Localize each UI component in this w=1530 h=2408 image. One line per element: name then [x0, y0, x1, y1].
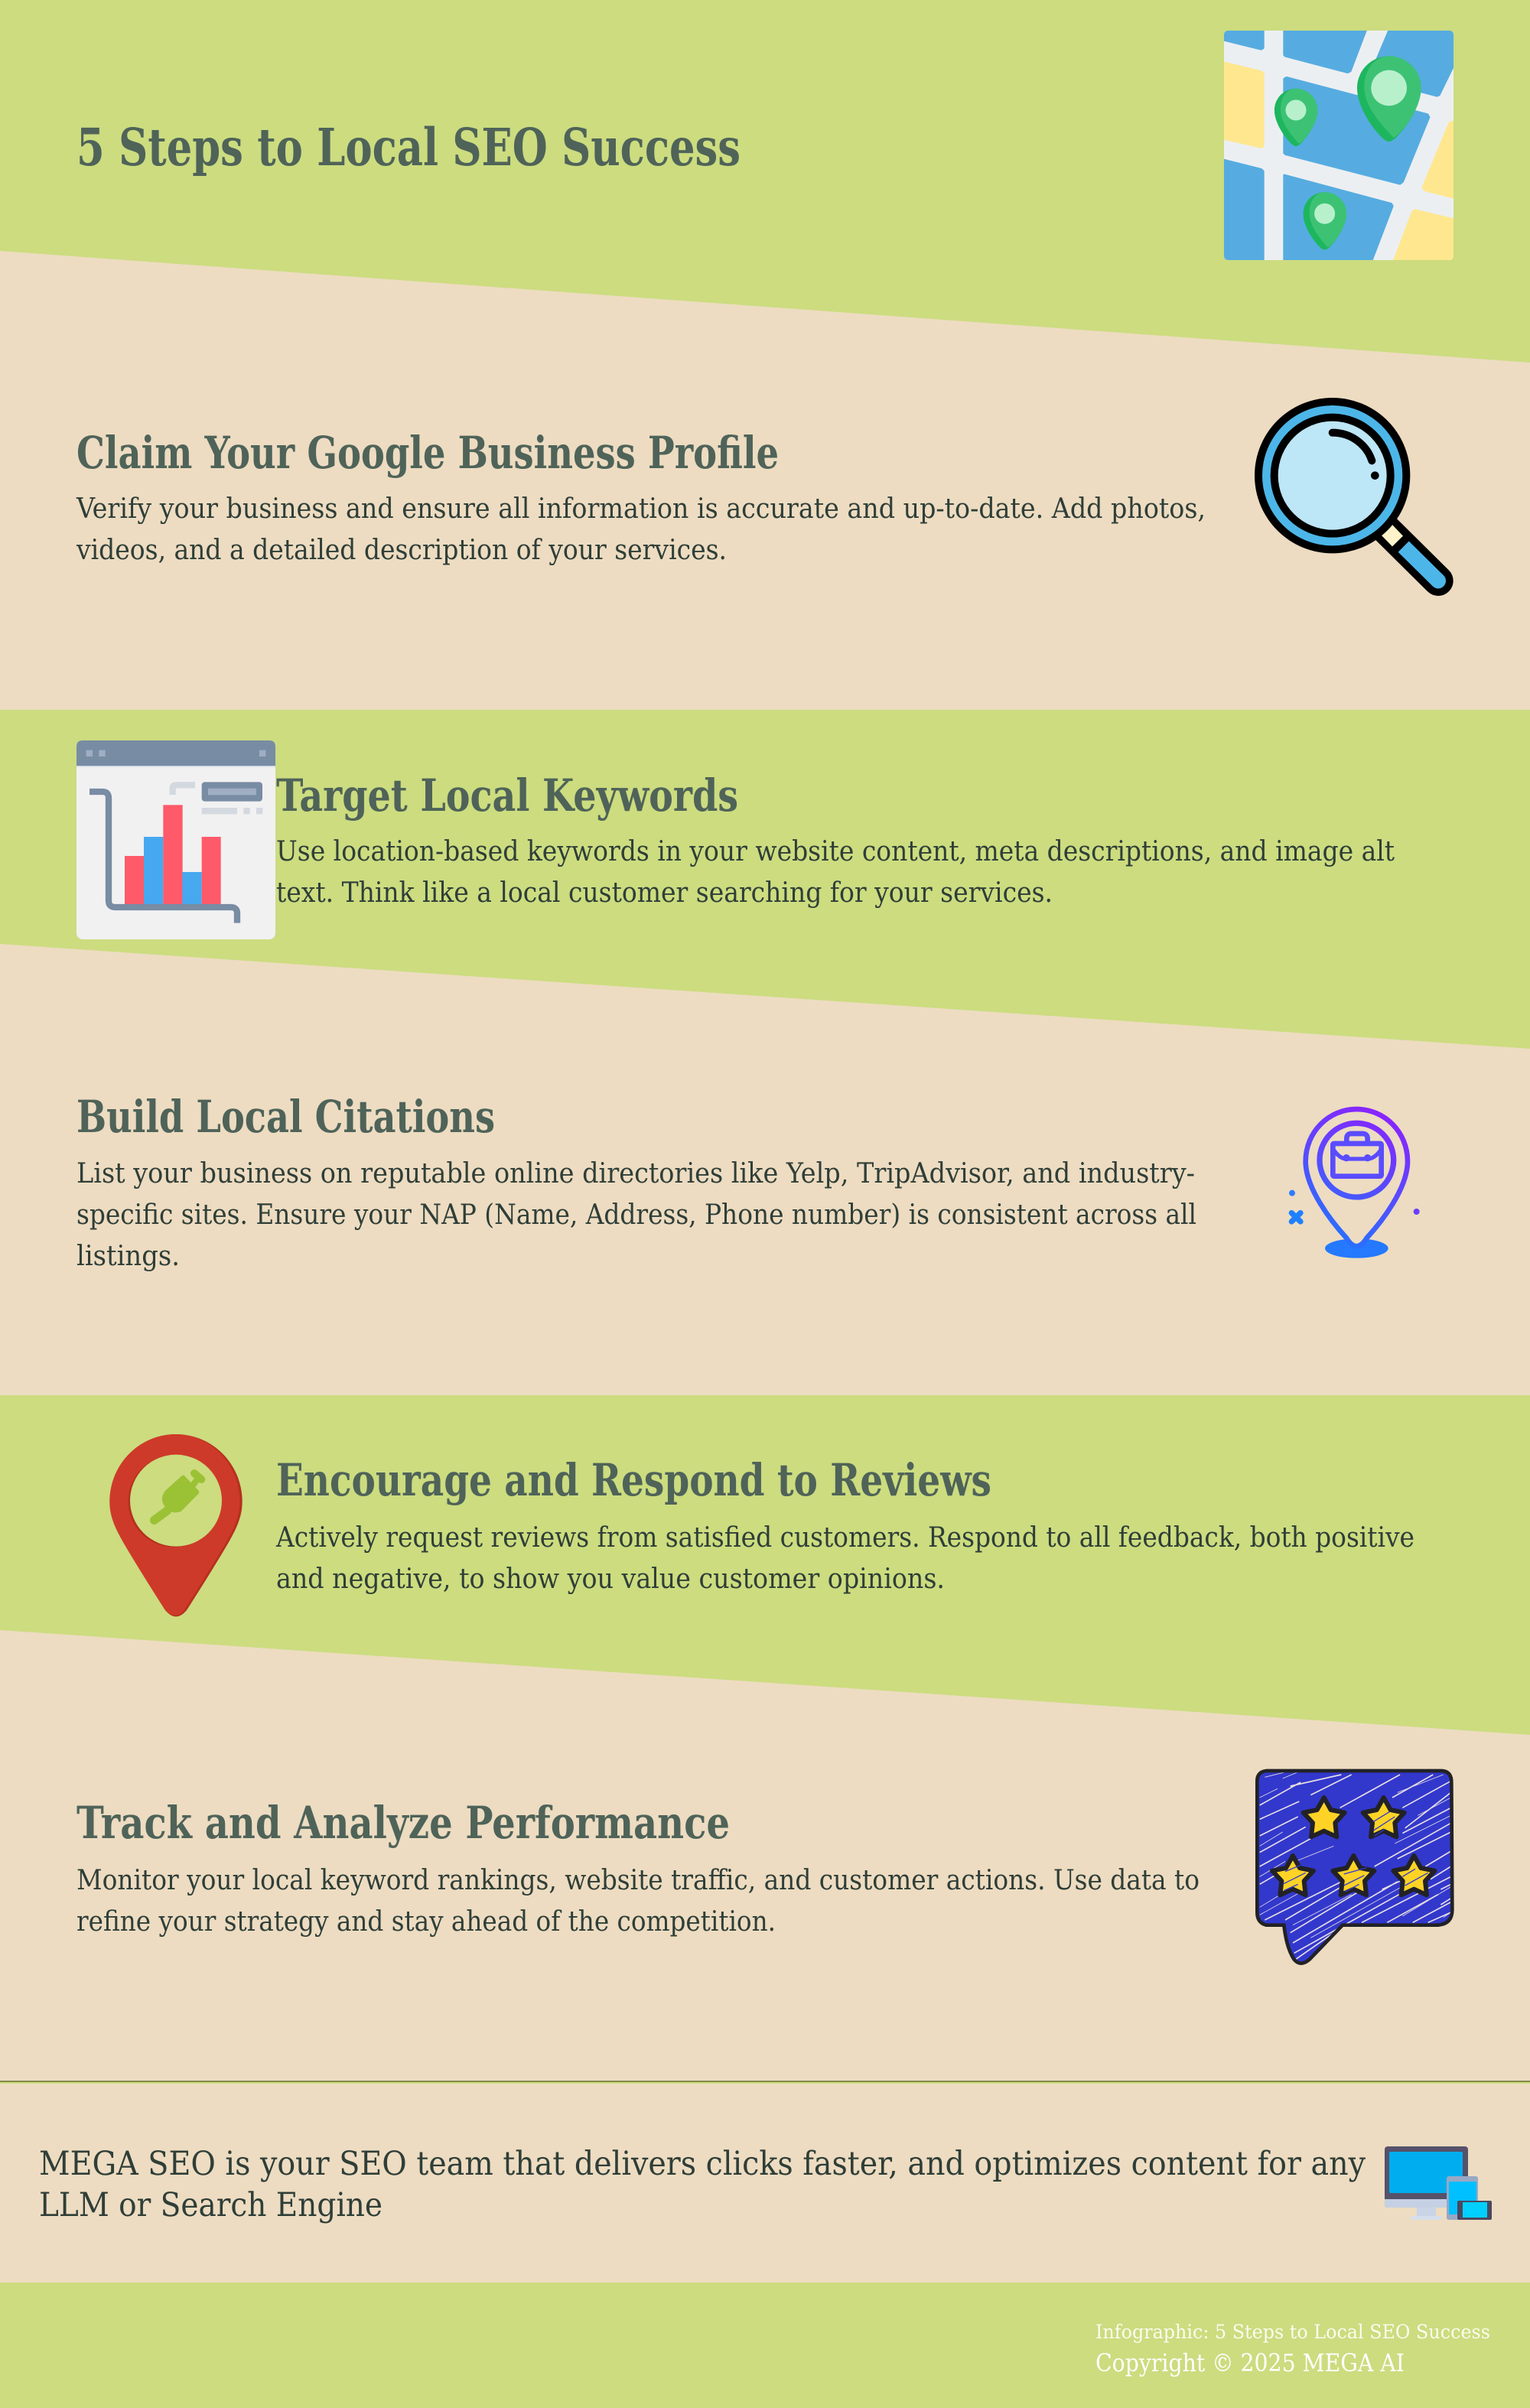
body text: and negative, to show you value customer opinions. — [276, 1564, 945, 1595]
body text: videos, and a detailed description of your services. — [76, 535, 727, 566]
panel: header — [0, 0, 1530, 363]
body text: Use location-based keywords in your website content, meta descriptions, and image alt — [276, 836, 1395, 867]
header green band — [0, 0, 1530, 363]
body text: refine your strategy and stay ahead of the competition. — [76, 1906, 776, 1938]
body text: text. Think like a local customer searching for your services. — [276, 877, 1053, 909]
heading: Target Local Keywords — [276, 770, 738, 822]
footer band — [0, 2283, 1530, 2408]
body text: specific sites. Ensure your NAP (Name, Address, Phone number) is consistent across all — [76, 1199, 1196, 1231]
heading: Build Local Citations — [76, 1091, 495, 1143]
panel: step 3 local citations — [76, 1091, 1420, 1272]
body text: List your business on reputable online directories like Yelp, TripAdvisor, and industry- — [76, 1158, 1195, 1189]
icon: responsive devices — [1385, 2146, 1492, 2220]
panel: step 2 target keywords — [0, 710, 1530, 1049]
copyright: Copyright © 2025 MEGA AI — [1095, 2348, 1405, 2377]
call to action text: MEGA SEO is your SEO team that delivers clicks faster, and optimizes content for any — [39, 2145, 1366, 2183]
heading: Claim Your Google Business Profile — [76, 427, 779, 479]
body text — [76, 1158, 1196, 1272]
call to action text — [39, 2145, 1366, 2224]
footer caption: Infographic: 5 Steps to Local SEO Success — [1095, 2321, 1490, 2344]
divider line — [0, 2081, 1530, 2084]
icon: magnifying glass — [1255, 398, 1446, 588]
icon: location pin with briefcase — [1289, 1109, 1420, 1258]
body text: listings. — [76, 1241, 180, 1272]
call to action text: LLM or Search Engine — [39, 2186, 382, 2224]
icon: browser window bar chart — [76, 740, 275, 939]
heading: Track and Analyze Performance — [76, 1797, 730, 1849]
panel: step 5 track performance — [76, 1771, 1452, 1964]
body text — [276, 836, 1395, 909]
icon: red map pin — [109, 1434, 243, 1616]
body text — [275, 1522, 1414, 1595]
green band — [0, 710, 1530, 1049]
heading: Encourage and Respond to Reviews — [276, 1454, 991, 1506]
title: 5 Steps to Local SEO Success — [76, 117, 741, 177]
icon: city map with pins — [1222, 29, 1455, 262]
panel: footer — [0, 2283, 1530, 2408]
panel: step 1 claim profile — [76, 398, 1446, 588]
body text — [76, 493, 1206, 566]
body text: Actively request reviews from satisfied customers. Respond to all feedback, both positive — [275, 1522, 1414, 1554]
panel: step 4 reviews — [0, 1395, 1530, 1735]
body text — [76, 1865, 1200, 1938]
body text: Monitor your local keyword rankings, website traffic, and customer actions. Use data to — [76, 1865, 1200, 1896]
body text: Verify your business and ensure all information is accurate and up-to-date. Add photos, — [76, 493, 1206, 525]
icon: speech bubble with five stars — [1257, 1771, 1452, 1964]
green band — [0, 1395, 1530, 1735]
panel: call to action — [39, 2145, 1492, 2224]
